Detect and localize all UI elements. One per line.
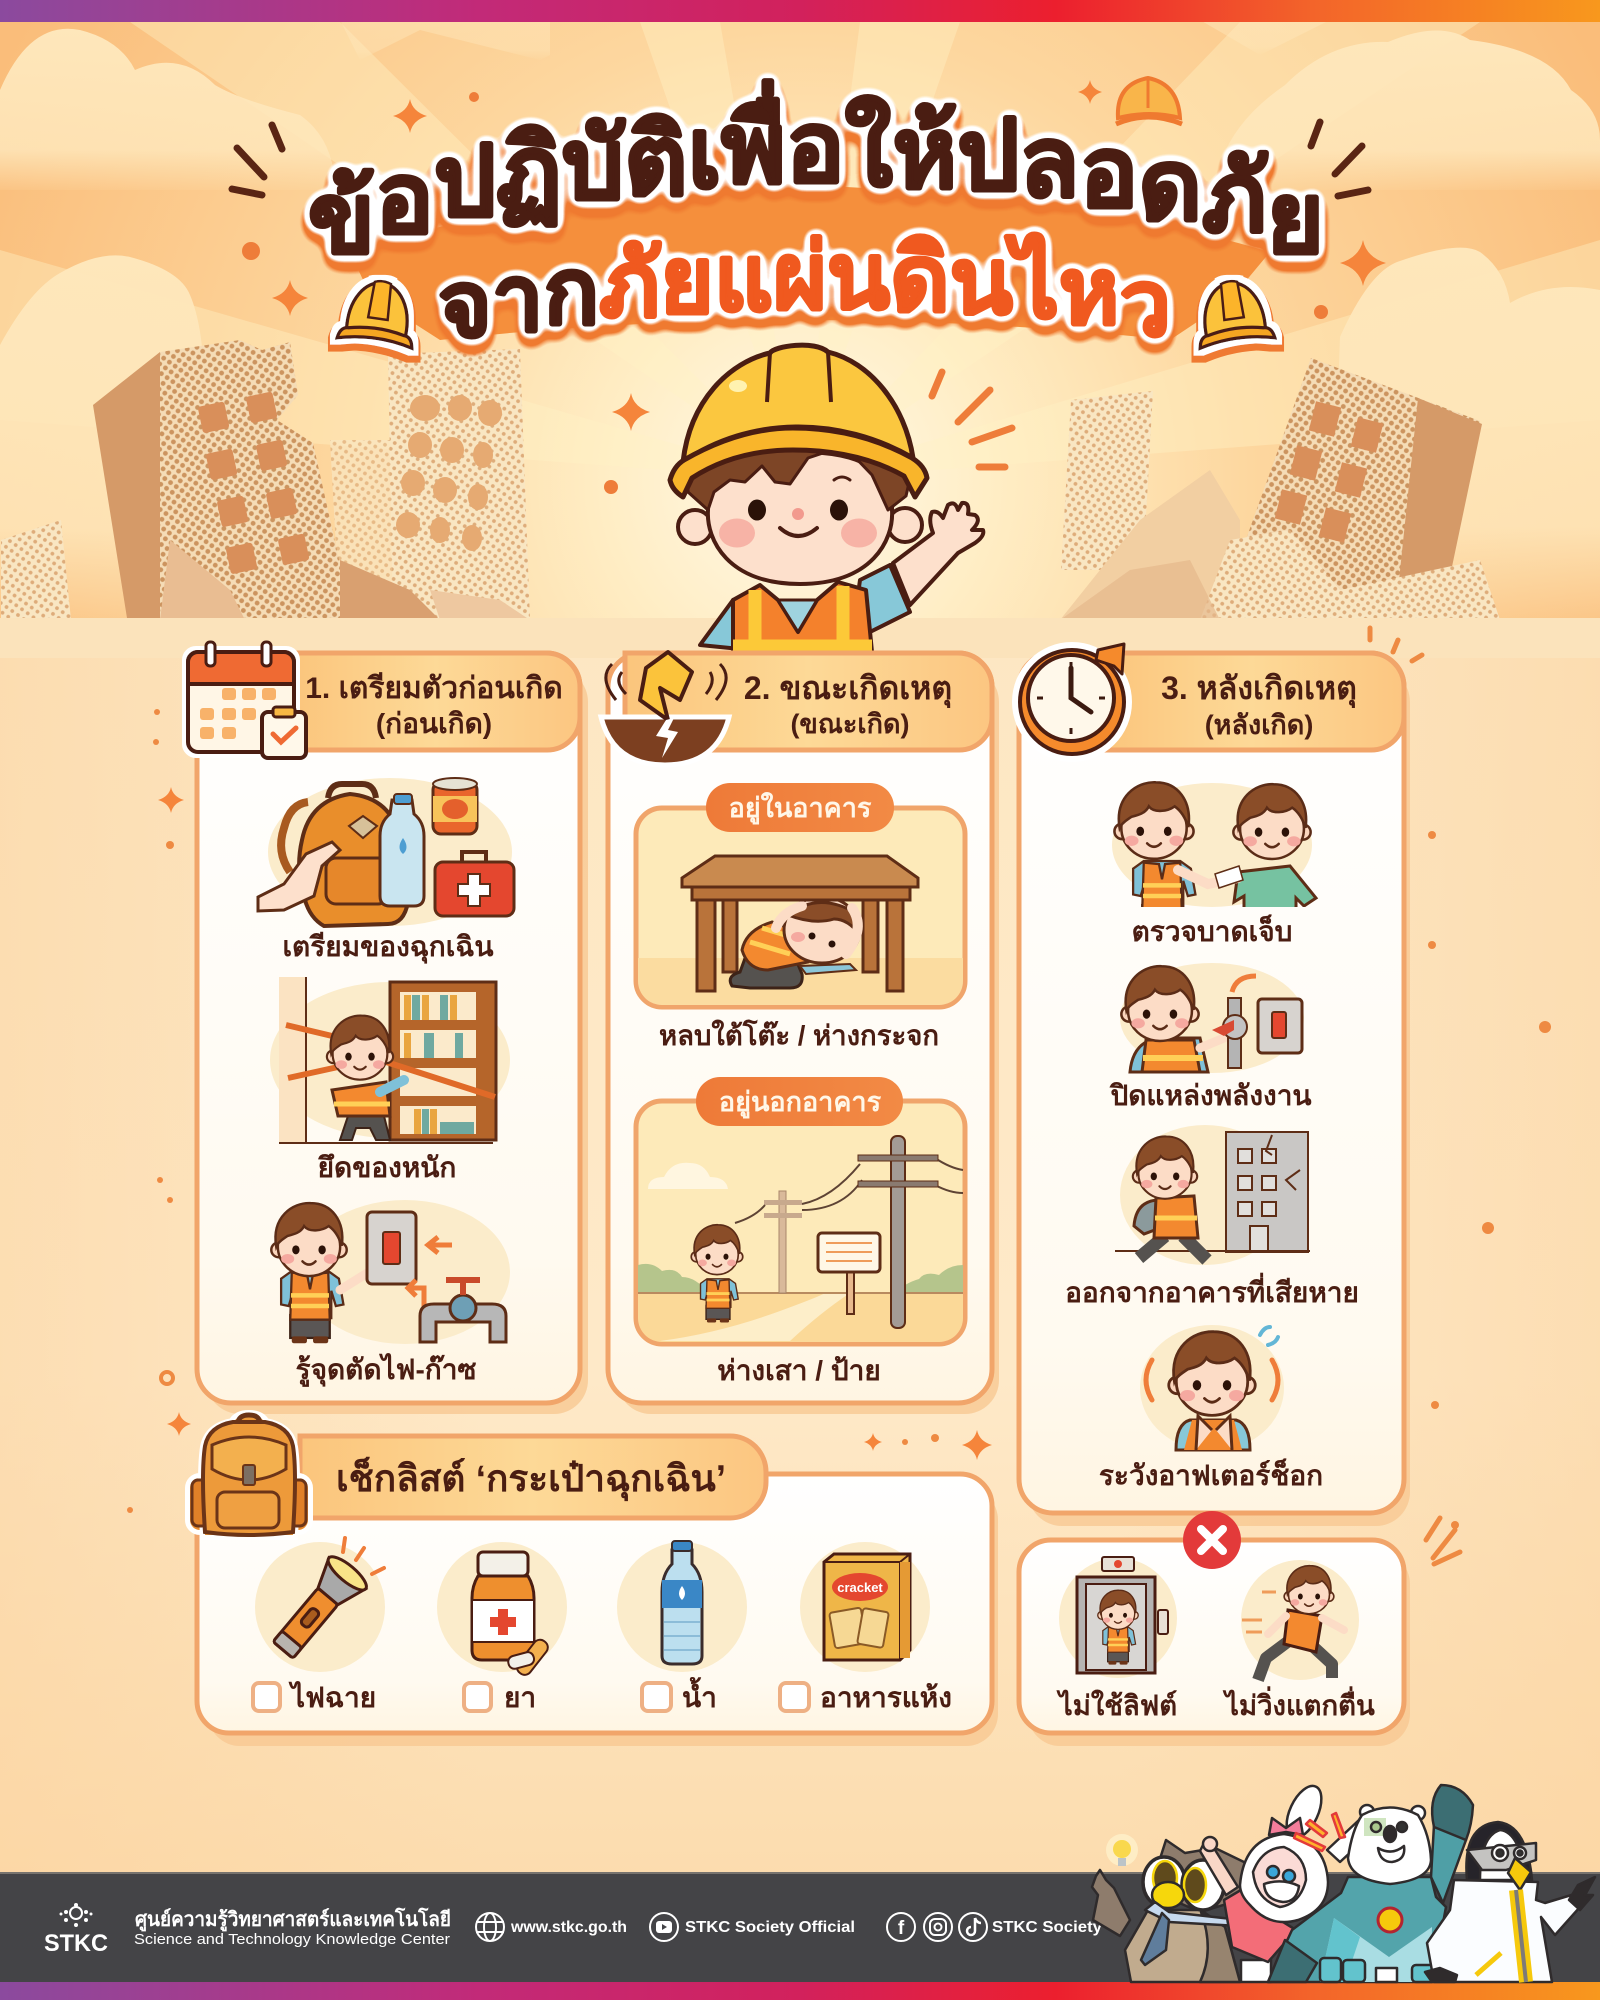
illustration: boy under table (682, 856, 918, 991)
footer: organisation name (134, 1907, 451, 1948)
top gradient bar (0, 0, 1600, 22)
heading 1 (305, 672, 563, 739)
mascots (1092, 1781, 1595, 1982)
title line 1: อ (375, 143, 434, 253)
title line 1: ห้ (893, 98, 957, 208)
title line 2: ว (1120, 253, 1171, 355)
footer: logo: STKC (44, 1930, 108, 1957)
label: ยึดของหนัก (318, 1152, 456, 1183)
title line 1: ฏิ (496, 116, 562, 227)
label: ออกจากอาคารที่เสียหาย (1065, 1272, 1359, 1308)
title line 1: ใ (845, 96, 893, 206)
title (308, 79, 1324, 356)
sub-panel: outdoors (636, 1077, 965, 1344)
header tab 2 (625, 653, 992, 750)
heading 1: (ก่อนเกิด) (376, 708, 492, 739)
label: ตรวจบาดเจ็บ (1132, 914, 1292, 947)
illustration: know shutoff points (271, 1200, 510, 1344)
title line 2: จ (438, 254, 492, 356)
header tab 3 (1100, 653, 1404, 750)
label: ไม่ใช้ลิฟต์ (1056, 1689, 1177, 1721)
sub-panel: indoors (636, 783, 965, 1007)
title line 2: า (492, 248, 544, 350)
decorative sparks and dots (127, 80, 1551, 1564)
illustration: secure furniture (270, 977, 510, 1143)
item: crackers: cracket (837, 1580, 883, 1595)
checkbox row: อาหารแห้ง (820, 1682, 952, 1713)
item: flashlight (255, 1538, 385, 1672)
icon: hard hat top (1116, 78, 1182, 124)
illustration: no running (1241, 1560, 1359, 1680)
title line 2: ห (1059, 241, 1120, 343)
header tab checklist (300, 1436, 766, 1518)
icon: calendar (186, 642, 306, 758)
heading 2: 2. ขณะเกิดเหตุ (744, 670, 952, 709)
title line 1: ข้ (308, 163, 375, 273)
footer: logo (44, 1903, 108, 1957)
ground band (0, 618, 1600, 658)
panel: 1 before (186, 642, 588, 1414)
footer: youtube: STKC Society Official (685, 1919, 855, 1936)
illustration: leave damaged building (1115, 1125, 1310, 1265)
title line 2: แ (714, 228, 773, 330)
mascot: light bulb (1106, 1834, 1138, 1866)
pill: indoors (706, 783, 894, 832)
pill: indoors: อยู่ในอาคาร (729, 792, 872, 825)
title line 1: พื่ (721, 79, 786, 203)
illustration: emergency kit (258, 778, 514, 926)
icon: clock (1012, 642, 1132, 762)
title line 2: ภั (599, 234, 661, 336)
item: water (617, 1541, 747, 1672)
title line 1: ด (1138, 130, 1202, 240)
title line 1: เ (688, 98, 721, 208)
heading 2: (ขณะเกิด) (790, 709, 910, 739)
icon: forbidden (1183, 1511, 1241, 1569)
mascot: rabbit (1200, 1781, 1368, 1982)
heading 2 (744, 670, 952, 739)
buildings: left ruins (1, 340, 530, 620)
checkbox row (253, 1676, 952, 1713)
footer band (0, 1872, 1600, 1982)
illustration: beware aftershock (1140, 1325, 1284, 1451)
heading 3: 3. หลังเกิดเหตุ (1161, 670, 1357, 709)
title line 1: ย (1267, 163, 1324, 273)
label: ระวังอาฟเตอร์ช็อก (1099, 1458, 1323, 1491)
title line 2: ย (660, 230, 714, 332)
mascot: bear robot (1268, 1785, 1473, 1982)
label: ห่างเสา / ป้าย (717, 1355, 881, 1386)
header tab checklist: เช็กลิสต์ ‘กระเป๋าฉุกเฉิน’ (336, 1455, 726, 1502)
title line 1: ป (957, 100, 1019, 210)
title line 2: ก (544, 241, 599, 343)
label: หลบใต้โต๊ะ / ห่างกระจก (659, 1018, 939, 1051)
mascot: owl (1092, 1840, 1246, 1982)
heading 1: 1. เตรียมตัวก่อนเกิด (305, 672, 563, 705)
footer: organisation name: Science and Technology Knowledge Center (134, 1931, 450, 1948)
illustration: away from poles (638, 1136, 963, 1341)
illustration: no elevator (1059, 1557, 1177, 1678)
icon: hard hat right (1191, 276, 1275, 348)
item: crackers (800, 1542, 930, 1672)
pill: outdoors (696, 1077, 903, 1126)
bottom gradient bar (0, 1982, 1600, 2000)
footer: website (476, 1913, 627, 1941)
heading 3 (1161, 670, 1357, 740)
label: รู้จุดตัดไฟ-ก๊าซ (296, 1353, 476, 1387)
clouds (0, 20, 1600, 620)
title banner backing (350, 185, 1270, 340)
icon: hard hat left (337, 276, 421, 348)
footer: organisation name: ศูนย์ความรู้วิทยาศาสตร์และเทคโนโลยี (135, 1907, 451, 1933)
footer: social (887, 1913, 1102, 1941)
title line 1: บั (562, 109, 625, 219)
title line 1: อ (1079, 117, 1138, 227)
title line 2: น (827, 226, 890, 328)
title line 2: น (950, 231, 1013, 333)
footer: social: f (898, 1918, 905, 1939)
buildings: right ruins (1060, 358, 1500, 620)
title line 1: ติ (624, 105, 688, 215)
heading 3: (หลังเกิด) (1205, 710, 1313, 740)
title line 2: ดิ (890, 228, 950, 330)
header tab 1 (292, 653, 580, 750)
panel: 3 after (1012, 642, 1410, 1526)
item: medicine (437, 1542, 567, 1678)
title line 1: อ (786, 92, 845, 202)
checkbox row: น้ำ (682, 1676, 717, 1713)
label: เตรียมของฉุกเฉิน (282, 931, 494, 964)
pill: outdoors: อยู่นอกอาคาร (719, 1087, 882, 1119)
footer: youtube (650, 1913, 855, 1941)
panel: 2 during (601, 652, 999, 1414)
panel: checklist (190, 1415, 998, 1746)
icon: cracked ground (601, 652, 729, 765)
checkbox row: ไฟฉาย (288, 1681, 376, 1713)
footer: website: www.stkc.go.th (510, 1919, 627, 1936)
title line 1: ป (434, 126, 496, 236)
mascot: penguin (1425, 1822, 1595, 1982)
panel: don'ts (1019, 1511, 1410, 1746)
title line 2: ผ่ (773, 226, 827, 328)
checkbox row: ยา (504, 1682, 536, 1713)
mascot: boy with hard hat (670, 345, 983, 652)
footer: social: STKC Society (992, 1919, 1102, 1936)
illustration: shut off utilities (1120, 963, 1304, 1073)
title line 1: ภั (1202, 142, 1268, 252)
label: ไม่วิ่งแตกตื่น (1222, 1686, 1375, 1721)
illustration: check injuries (1112, 781, 1318, 907)
title line 1: ล (1019, 107, 1079, 217)
title line 2: ไ (1004, 233, 1059, 337)
label: ปิดแหล่งพลังงาน (1108, 1080, 1312, 1111)
icon: backpack (190, 1415, 308, 1535)
